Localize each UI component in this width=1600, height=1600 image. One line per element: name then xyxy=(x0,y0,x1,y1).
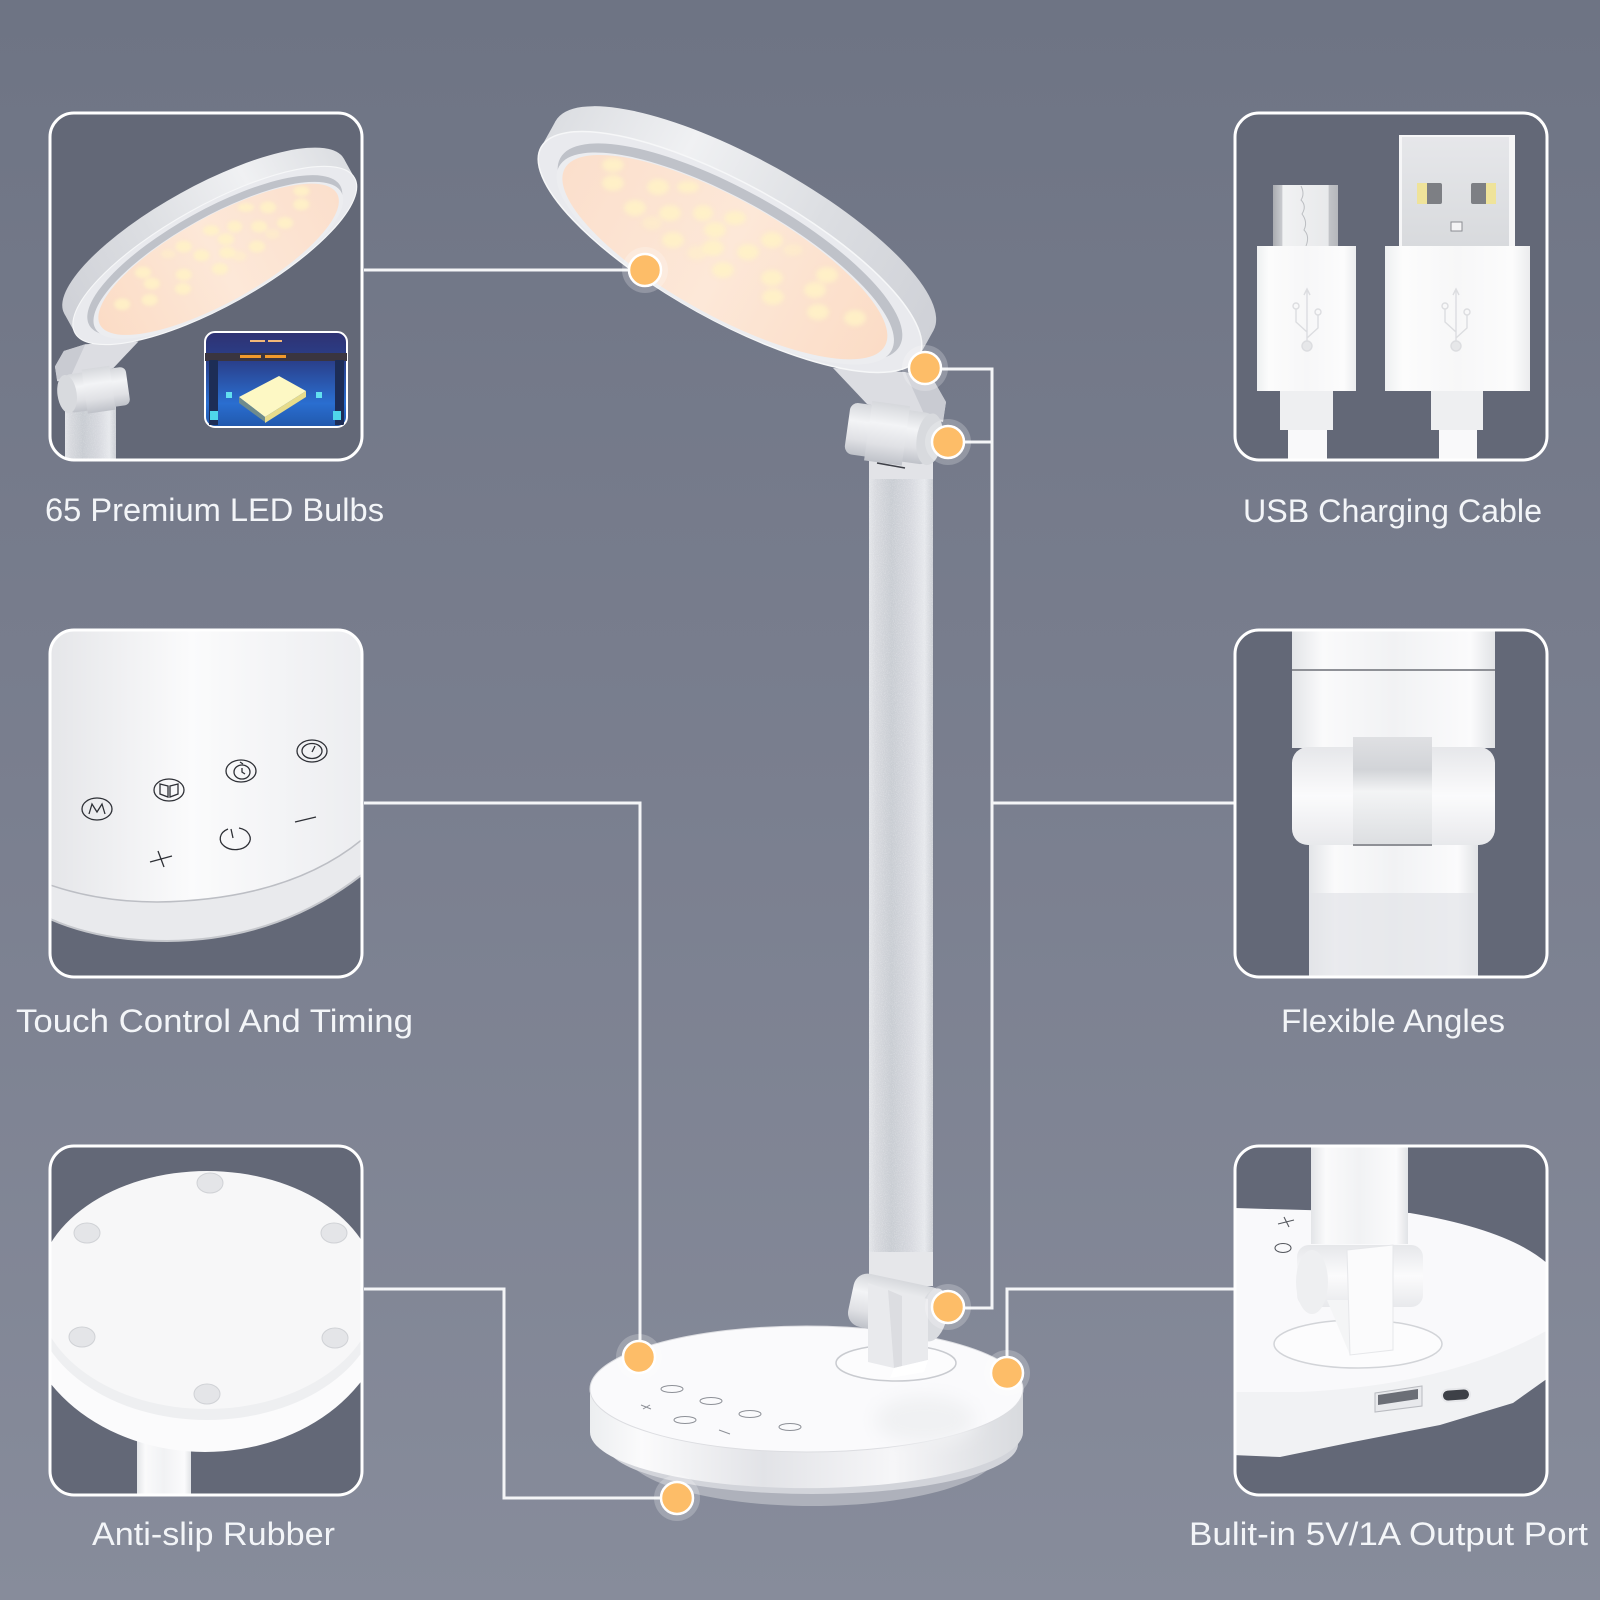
panel: touch control and timing xyxy=(50,628,364,977)
USB-A connector xyxy=(1385,135,1530,462)
stem and hinge xyxy=(1296,1144,1423,1355)
label: Anti-slip Rubber: Anti-slip Rubber xyxy=(92,1516,335,1552)
lamp base xyxy=(590,1326,1023,1506)
marker: rubber feet xyxy=(654,1475,700,1521)
marker: LED panel xyxy=(622,247,668,293)
touch icons xyxy=(82,740,327,867)
marker: lower hinge xyxy=(925,1284,971,1330)
panel: anti-slip rubber xyxy=(48,1144,364,1496)
connector line: flexible angles bracket xyxy=(940,369,1234,1308)
panel: flexible angles xyxy=(1235,628,1547,980)
panel: 65 premium LED bulbs xyxy=(41,113,379,462)
lower hinge xyxy=(845,1271,952,1378)
USB-C port xyxy=(1442,1388,1470,1402)
marker: touch buttons xyxy=(616,1334,662,1380)
label: Touch Control And Timing: Touch Control And Timing xyxy=(16,1003,413,1039)
base touch icons xyxy=(1275,1217,1294,1252)
marker: upper hinge xyxy=(925,419,971,465)
hinge gap xyxy=(877,463,905,468)
connector line: anti-slip rubber xyxy=(364,1289,665,1498)
lamp pole xyxy=(869,453,933,1286)
USB-A port xyxy=(1375,1386,1422,1412)
panel: USB charging cable xyxy=(1235,113,1547,462)
marker: output port xyxy=(984,1350,1030,1396)
panel: built-in output port xyxy=(1233,1144,1548,1495)
marker dots xyxy=(616,247,1030,1521)
label: 65 Premium LED Bulbs: 65 Premium LED Bulbs xyxy=(45,492,384,528)
micro USB connector xyxy=(1257,185,1356,462)
connector line: touch control xyxy=(364,803,640,1345)
touch buttons on base xyxy=(641,1386,801,1434)
connector line: LED bulbs xyxy=(364,268,632,272)
main lamp illustration xyxy=(508,63,1023,1506)
label: Flexible Angles: Flexible Angles xyxy=(1281,1003,1505,1039)
lamp head with LED panel xyxy=(508,63,965,471)
inset: LED chip scene xyxy=(205,332,347,427)
rubber feet xyxy=(69,1173,348,1404)
connector line: output port xyxy=(1007,1289,1234,1360)
label: USB Charging Cable: USB Charging Cable xyxy=(1243,493,1542,529)
label: Bulit-in 5V/1A Output Port: Bulit-in 5V/1A Output Port xyxy=(1189,1516,1588,1552)
marker: head joint xyxy=(902,345,948,391)
